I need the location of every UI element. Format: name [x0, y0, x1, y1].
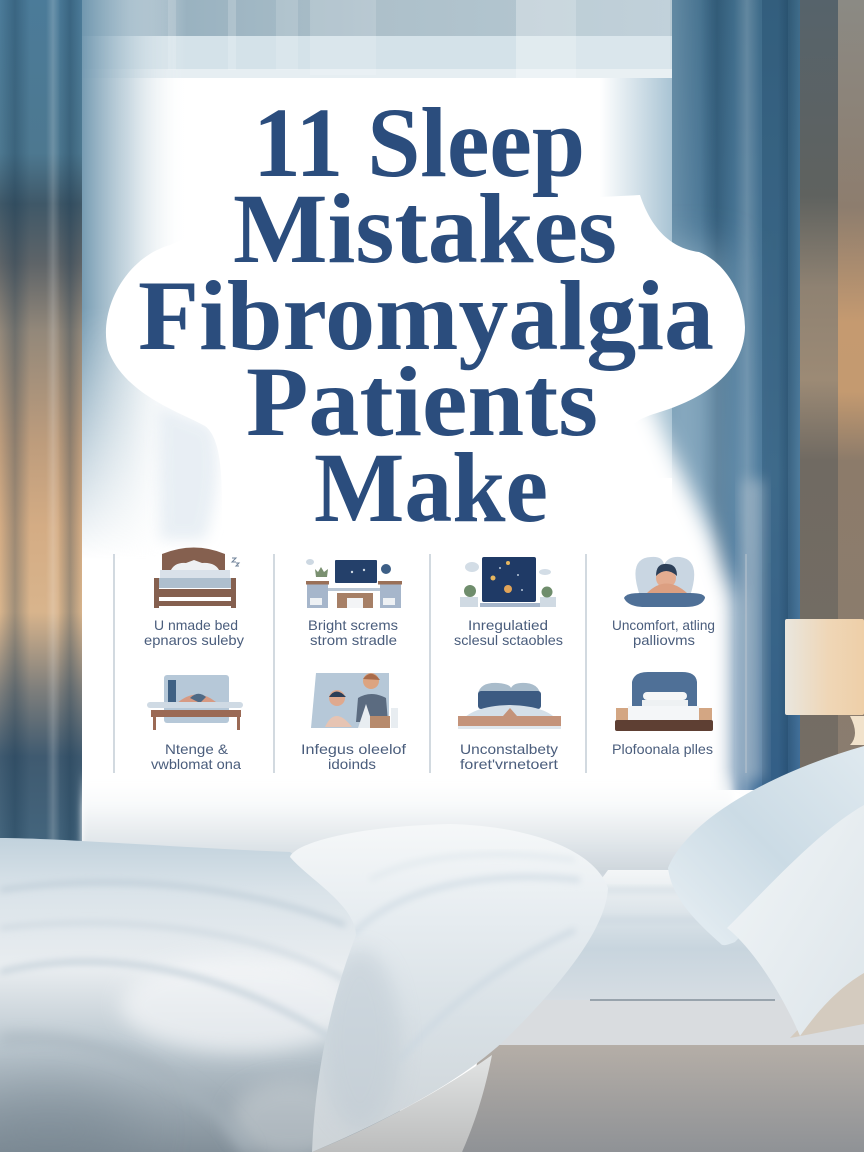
sheer curtains — [82, 0, 672, 560]
icon: person asleep on low bed — [147, 675, 243, 730]
caption: Unmade bed — [144, 617, 244, 648]
caption: middle second row: Infegus oleelof — [301, 741, 406, 757]
left duvet — [0, 835, 400, 1152]
caption: middle second row: idoinds — [328, 756, 376, 772]
icon: bed with blue headboard — [458, 683, 561, 729]
icon: couple awake in bed — [311, 673, 398, 728]
window — [82, 0, 672, 880]
caption: Irregulated schedules: sclesul sctaobles — [454, 632, 563, 648]
caption: Uncomfortable pillows — [612, 617, 715, 648]
title: Patients — [246, 346, 598, 457]
caption: Irregulated schedules — [454, 617, 563, 648]
front pillow — [727, 805, 864, 1036]
icon: desk with bright screen — [306, 559, 402, 608]
mattress — [462, 870, 864, 1152]
left curtain — [0, 0, 84, 850]
title — [138, 87, 714, 543]
icon: person on uncomfortable pillow — [624, 557, 705, 607]
title: Fibromyalgia — [138, 260, 714, 371]
caption: Unmade bed: epnaros suleby — [144, 632, 244, 648]
bed — [0, 746, 864, 1152]
caption: Bright screens: Bright screms — [308, 617, 398, 633]
lower haze above the bed — [82, 770, 732, 880]
title: 11 Sleep — [253, 87, 585, 198]
background: bedroom wall — [798, 0, 864, 1152]
cream underside of pillow — [790, 960, 864, 1038]
icon: bed with dark frame — [615, 672, 713, 731]
caption: Uncomfortable bedding: foret'vrnetoert — [460, 756, 558, 772]
column dividers — [114, 554, 746, 773]
soft white fade over right curtain — [590, 400, 735, 895]
caption: left second row: Ntenge & — [165, 741, 229, 757]
caption: Pillows: Plofoonala plles — [612, 741, 713, 757]
caption: middle second row — [301, 741, 406, 772]
white cloud behind title — [106, 195, 745, 530]
caption: Bright screens — [308, 617, 398, 648]
right curtain — [660, 0, 800, 790]
caption: left second row: vwblomat ona — [151, 756, 241, 772]
caption: Uncomfortable bedding: Unconstalbety — [460, 741, 558, 757]
caption: Unmade bed: U nmade bed — [154, 617, 238, 633]
caption: Irregulated schedules: Inregulatied — [468, 617, 548, 633]
icon: dark screen with plants — [460, 557, 556, 607]
title: Mistakes — [233, 173, 617, 284]
title: Make — [314, 432, 548, 543]
icon: bed with wooden frame — [154, 548, 239, 608]
back pillow — [668, 746, 864, 945]
lamp — [785, 619, 864, 745]
centre duvet fold — [280, 820, 620, 1152]
caption: Uncomfortable bedding — [460, 741, 558, 772]
lower duvet drape — [312, 1055, 492, 1152]
caption: Uncomfortable pillows: palliovms — [633, 632, 695, 648]
caption: left second row — [151, 741, 241, 772]
caption: Uncomfortable pillows: Uncomfort, atling — [612, 617, 715, 633]
caption: Bright screens: strom stradle — [310, 632, 397, 648]
